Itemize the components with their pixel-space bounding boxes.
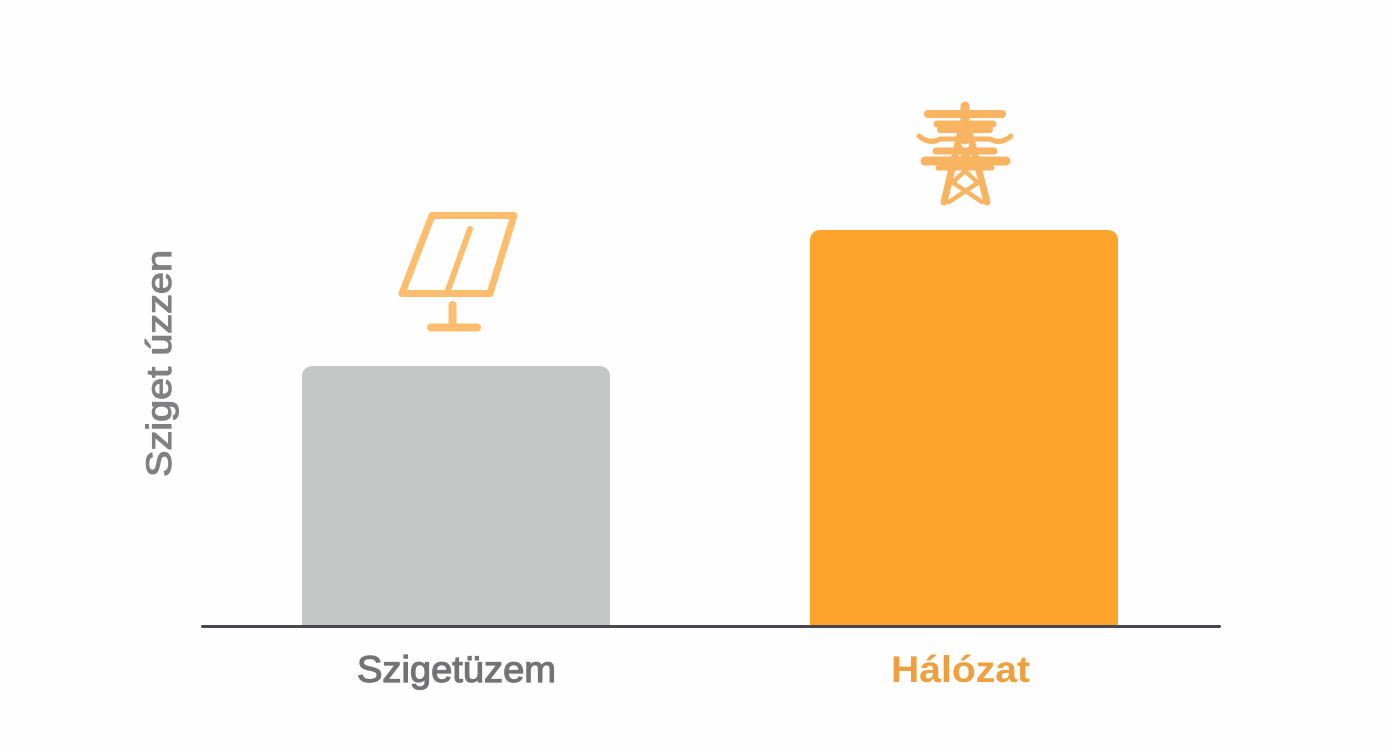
icon: transmission tower: [919, 106, 1011, 202]
y axis label: Sziget úzzen: [140, 250, 179, 477]
icon: solar panel: [402, 216, 514, 328]
bar: Szigetüzem: [302, 366, 610, 626]
bar: Hálózat: [810, 230, 1118, 626]
category label: Hálózat: Hálózat: [891, 649, 1030, 690]
category label: Szigetüzem: Szigetüzem: [357, 649, 556, 690]
x axis line: [201, 625, 1221, 628]
